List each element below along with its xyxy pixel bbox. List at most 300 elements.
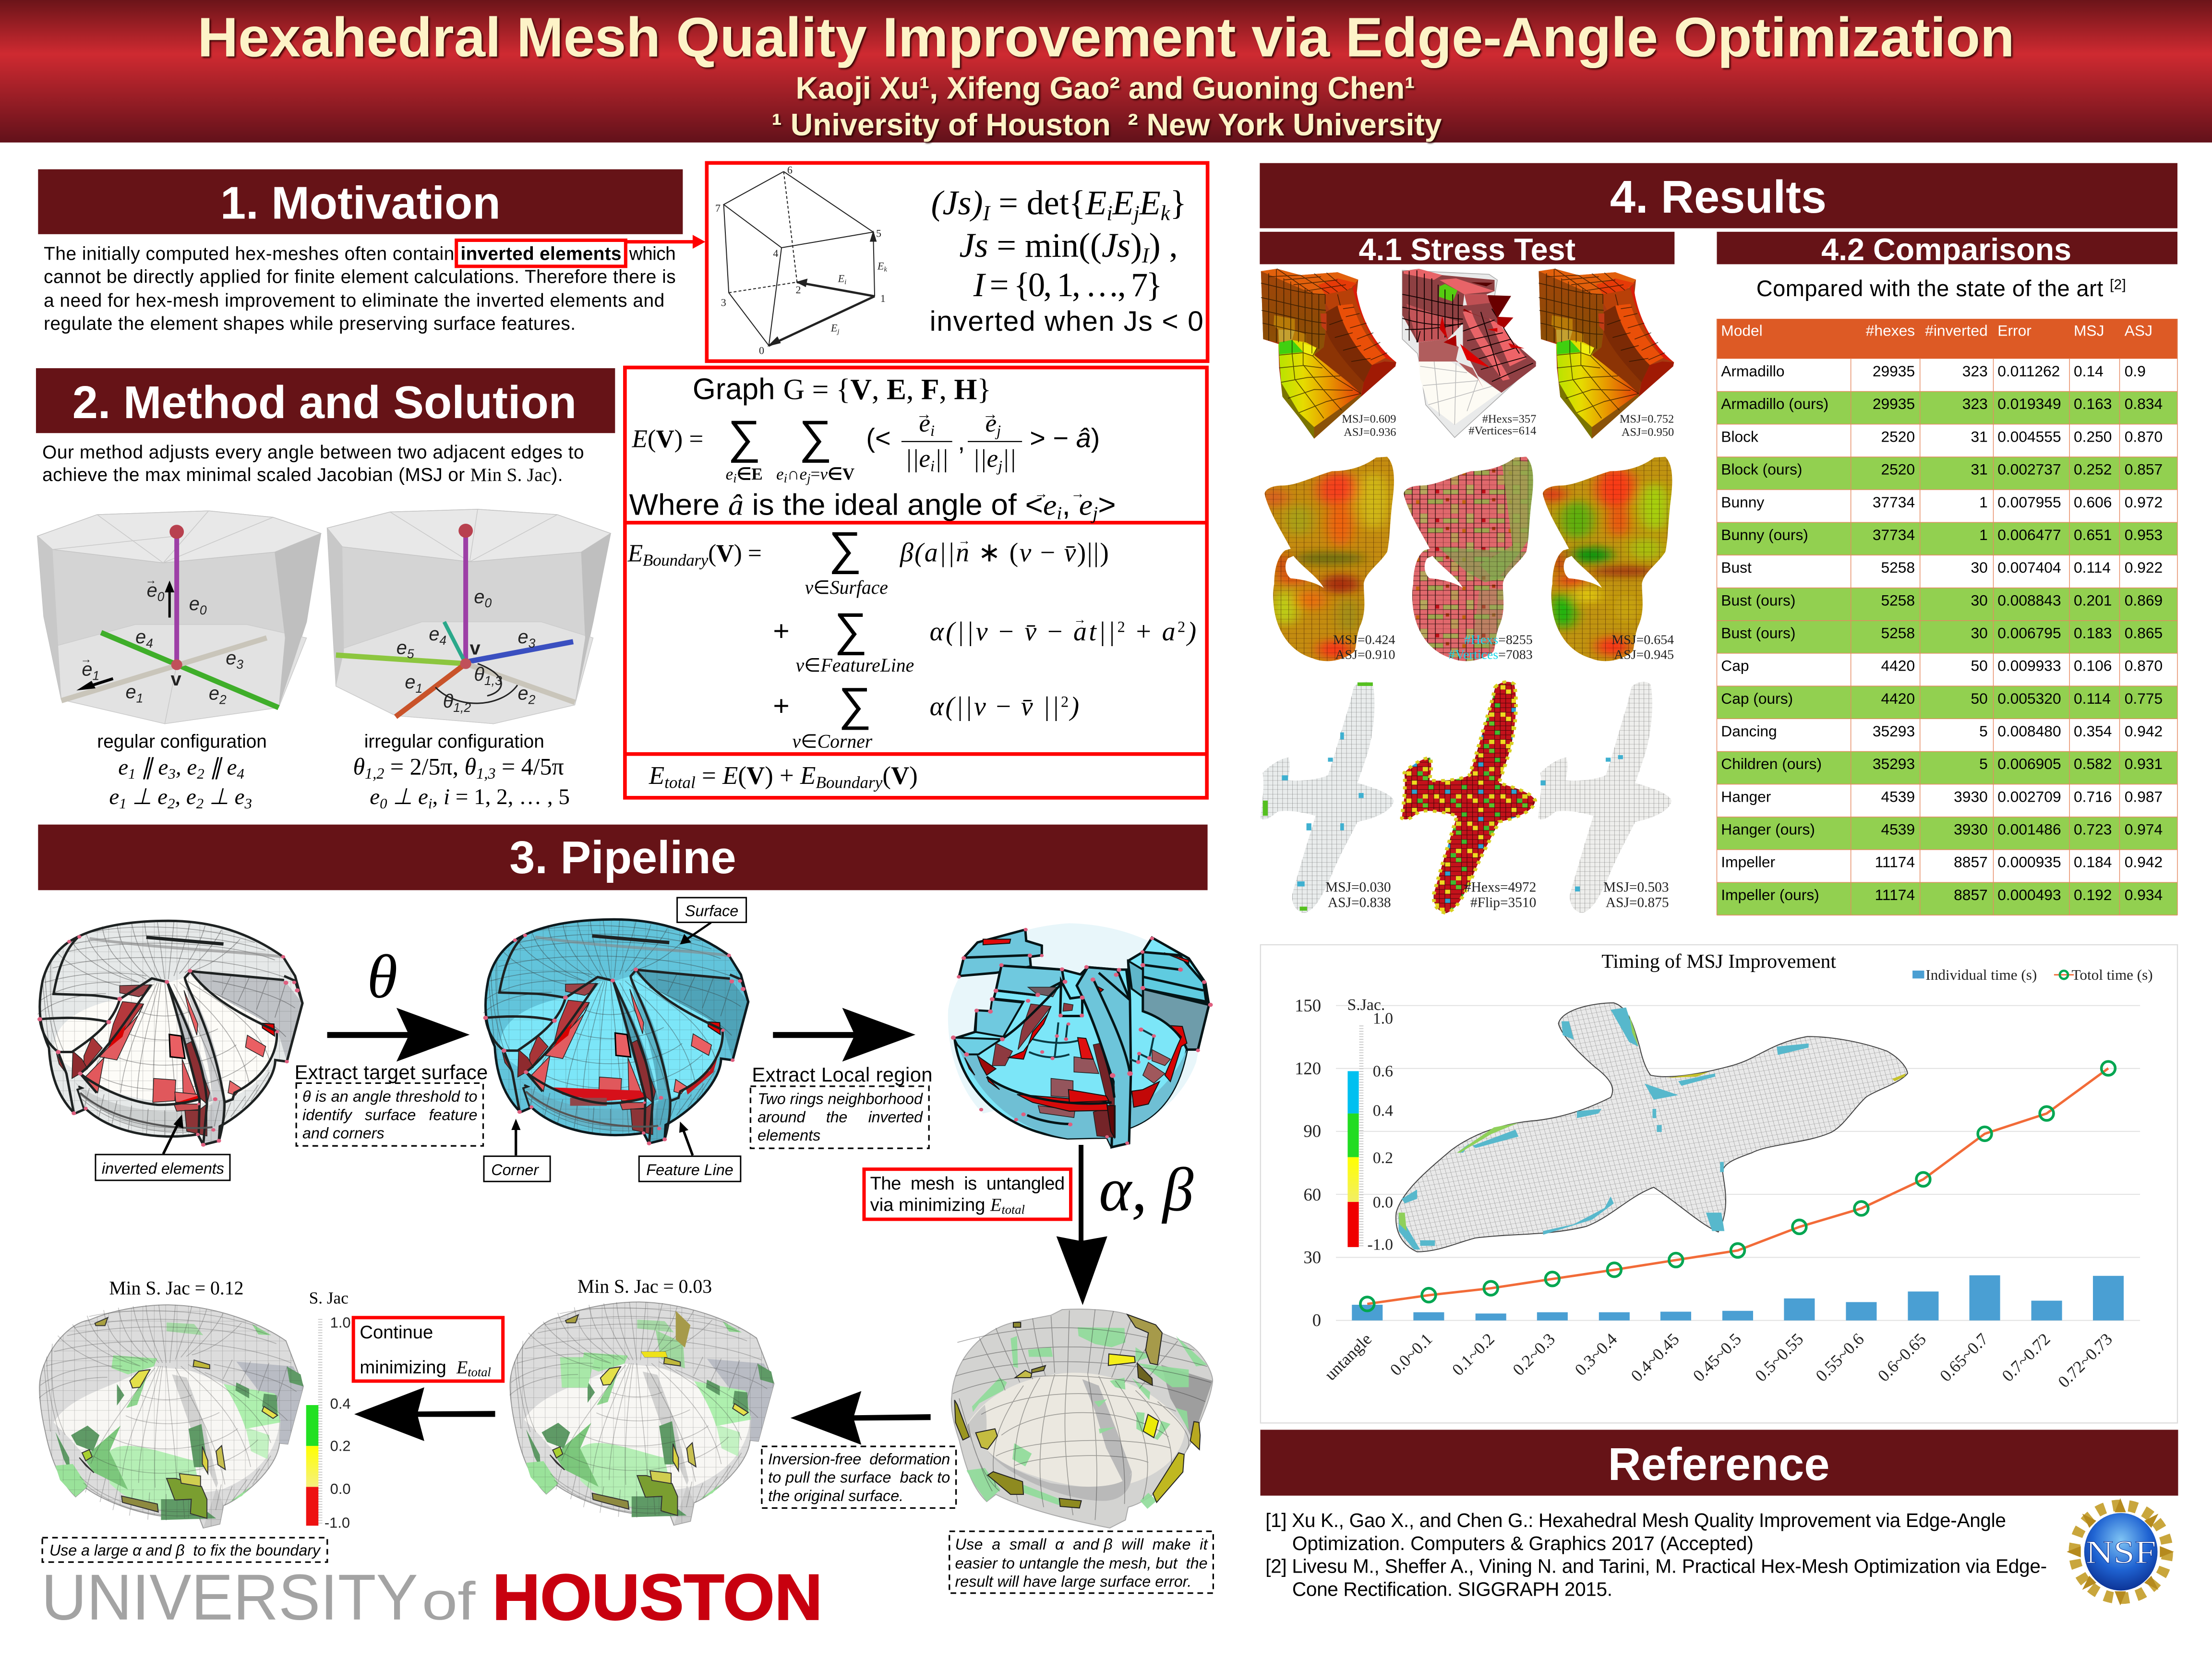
formula: boundary energy: v∈Surface [805, 577, 888, 598]
formula: boundary energy: + [773, 690, 790, 721]
caption: irregular configuration: e [370, 784, 380, 809]
row: Children ours: 5 [1979, 755, 1988, 772]
chart x labels: 0.6~0.65 [1874, 1330, 1930, 1385]
note: inversion-free deformation [762, 1446, 956, 1508]
caption: regular configuration [97, 732, 267, 812]
formula: boundary energy: Boundary [643, 551, 709, 569]
row: Impeller ours: 0.192 [2074, 886, 2112, 903]
logo: NSF: NSF [2086, 1534, 2156, 1570]
row: Bust ours second: 0.865 [2125, 625, 2163, 642]
row: Bust ours: 0.869 [2125, 591, 2163, 609]
formula: angle energy: > − â) [1030, 423, 1100, 453]
row: Impeller: 0.184 [2074, 854, 2112, 871]
colorbar: S.Jac: 0.2 [1373, 1149, 1393, 1167]
arrow: left to final result [354, 1387, 495, 1441]
chart axis and gridlines: 0 [1312, 1310, 1321, 1330]
formula: boundary energy: ∑ [829, 522, 862, 575]
row: Block ours: Block (ours) [1721, 461, 1803, 478]
chart legend: Individual time (s) [1925, 966, 2037, 983]
model: plane input [1261, 682, 1394, 913]
chart x labels: 0.7~0.72 [1998, 1330, 2054, 1385]
formula: angle energy: (< [866, 423, 891, 453]
text: reference list: Optimization. Computers & Graphics 2017 (Accepted) [1292, 1532, 1754, 1554]
arrow: alpha beta downward [1057, 1145, 1107, 1305]
formula: boundary energy: 2 [1118, 618, 1125, 636]
row: Hanger ours [1721, 821, 2163, 838]
callout: feature line [639, 1121, 741, 1181]
labels: stress test metrics: ASJ=0.875 [1606, 895, 1669, 911]
caption: regular configuration: 2 [196, 795, 204, 812]
panel: energy formulas [625, 368, 1207, 798]
chart x labels: 0.72~0.73 [2055, 1330, 2116, 1391]
note: inversion-free deformation: the original surface. [768, 1487, 903, 1504]
row: Armadillo ours: 0.163 [2074, 395, 2112, 412]
row: Armadillo ours [1721, 395, 2163, 412]
row: Bunny ours: 37734 [1873, 526, 1915, 543]
caption: regular configuration: e [109, 784, 119, 809]
row: Block ours: 31 [1971, 461, 1988, 478]
caption: regular configuration: , e [176, 755, 197, 780]
row: Bust ours second: Bust (ours) [1721, 625, 1795, 642]
row: Bunny ours: Bunny (ours) [1721, 526, 1808, 543]
symbol: alpha beta: α, β [1099, 1155, 1194, 1224]
labels: stress test metrics: #Hexs=8255 [1464, 633, 1533, 648]
diagram: hexahedron element: k [884, 266, 887, 274]
figure: regular configuration prism: v [171, 669, 181, 690]
formula: angle energy: → [983, 405, 998, 422]
caption: regular configuration: ⊥ e [127, 784, 168, 809]
text: reference list: [1] Xu K., Gao X., and Chen G.: Hexahedral Mesh Quality Improvement via Edge-Angle [1265, 1509, 2006, 1531]
figure: regular configuration prism: e [126, 682, 136, 703]
text: where clause: j [1090, 503, 1098, 523]
row: Block: 0.870 [2125, 428, 2163, 445]
figure: regular configuration prism: 4 [146, 636, 153, 650]
row: Hanger: 0.002709 [1997, 788, 2061, 805]
model: plane inverted [1402, 682, 1535, 913]
text: motivation paragraph: a need for hex-mesh improvement to eliminate the inverted elements and [44, 290, 664, 311]
labels: stress test metrics: ASJ=0.838 [1328, 895, 1391, 911]
caption: irregular configuration: θ [353, 753, 365, 780]
labels: stress test metrics: MSJ=0.752 [1620, 413, 1674, 426]
labels: stress test metrics: MSJ=0.609 [1342, 413, 1396, 426]
formula: boundary energy: ) [1069, 692, 1079, 721]
note: theta threshold: θ is an angle threshold to [302, 1088, 477, 1105]
row: Armadillo ours: 0.019349 [1997, 395, 2061, 412]
formula: boundary energy: + [1127, 617, 1160, 647]
note: use a large alpha beta: Use a large α and β to fix the boundary [49, 1542, 321, 1559]
text: reference list: [2] Livesu M., Sheffer A., Vining N. and Tarini, M. Practical Hex-Mesh Optimization via Edge- [1265, 1555, 2047, 1577]
heading: pipeline [38, 825, 1208, 890]
row: Hanger ours: 0.001486 [1997, 821, 2061, 838]
row: Bust: 30 [1971, 559, 1988, 576]
row: Block ours [1721, 461, 2163, 478]
colorbar: S. Jac: 1.0 [330, 1314, 351, 1331]
labels: stress test metrics: ASJ=0.945 [1614, 647, 1674, 662]
section 2: method and solution [36, 368, 615, 812]
text: where clause: → [1034, 485, 1048, 501]
chart x labels: 0.3~0.4 [1571, 1330, 1621, 1379]
figure: regular configuration prism: 1 [93, 668, 99, 683]
text: method description: Our method adjusts every angle between two adjacent edges to [42, 442, 584, 463]
title: Hexahedral Mesh Quality Improvement via Edge-Angle Optimization [197, 6, 2015, 69]
chart axis and gridlines: 150 [1295, 996, 1321, 1015]
row: Cap: Cap [1721, 657, 1749, 674]
formula: scaled jacobian: } [1170, 184, 1187, 222]
chart x labels: 0.0~0.1 [1386, 1330, 1436, 1379]
formula: angle energy: ||e [905, 445, 930, 473]
table header: Error [1997, 322, 2032, 339]
labels: stress test metrics: MSJ=0.030 [1325, 879, 1391, 895]
formula: angle energy: j [995, 422, 1001, 439]
mesh: untangled grey dome [951, 1309, 1213, 1528]
diagram: hexahedron element: i [844, 278, 846, 286]
diagram: hexahedron element: j [836, 328, 840, 336]
row: Bunny: 0.007955 [1997, 493, 2061, 511]
row: Bust: 0.922 [2125, 559, 2163, 576]
table header [1717, 319, 2177, 359]
row: Bust ours second: 30 [1971, 625, 1988, 642]
model: plane ours [1538, 682, 1671, 913]
mesh: local region fragments [948, 923, 1213, 1147]
row: Cap ours [1721, 690, 2163, 707]
formula: boundary energy: + [773, 615, 790, 647]
colorbar: S.Jac: 0.4 [1373, 1102, 1393, 1120]
heading: stress test: 4.1 Stress Test [1359, 232, 1575, 267]
chart x labels: 0.2~0.3 [1509, 1330, 1559, 1379]
figure: irregular configuration prism: 4 [439, 633, 446, 648]
figure: irregular configuration prism [327, 509, 611, 724]
row: Bunny: Bunny [1721, 493, 1764, 511]
formula: angle energy [632, 405, 1100, 485]
model: fandisk input [1261, 269, 1396, 439]
row: Cap: 50 [1971, 657, 1988, 674]
row: Cap: 0.870 [2125, 657, 2163, 674]
formula: angle energy: i [930, 422, 935, 439]
formula: angle energy: e [919, 409, 930, 437]
figure: irregular configuration prism: e [429, 624, 439, 645]
row: Bunny ours: 0.651 [2074, 526, 2112, 543]
chart axis and gridlines: 120 [1295, 1058, 1321, 1078]
row: Impeller: 0.000935 [1997, 854, 2061, 871]
affiliations: ¹ University of Houston ² New York University [772, 107, 1442, 142]
caption: irregular configuration: i = 1, 2, … , 5 [444, 784, 570, 809]
text: where clause: Where â is the ideal angle of < e [629, 489, 1056, 522]
table header: MSJ [2074, 322, 2104, 339]
row: Bust ours: 5258 [1881, 591, 1915, 609]
caption: irregular configuration: 0 [380, 795, 387, 812]
callout: continue minimizing: total [468, 1365, 491, 1379]
formula: angle energy: e [799, 465, 807, 483]
row: Cap: 0.106 [2074, 657, 2112, 674]
formula: scaled jacobian [930, 184, 1203, 337]
row: Armadillo: 0.011262 [1997, 362, 2060, 380]
heading: results: 4. Results [1610, 172, 1827, 223]
row: Bunny ours: 1 [1979, 526, 1988, 543]
logo: NSF [2067, 1498, 2174, 1605]
formula: scaled jacobian: E [1085, 184, 1106, 222]
figure: irregular configuration prism: e [518, 683, 529, 704]
formula: scaled jacobian: I [983, 201, 991, 225]
row: Impeller: 11174 [1875, 854, 1915, 871]
labels: stress test metrics: ASJ=0.950 [1622, 426, 1674, 439]
title banner [0, 0, 2212, 143]
labels: stress test metrics: ASJ=0.910 [1335, 647, 1395, 662]
row: Block ours: 2520 [1881, 461, 1915, 478]
formula: total energy: = [696, 762, 722, 790]
row: Cap: 4420 [1881, 657, 1915, 674]
chart bars: individual time [1352, 1275, 2124, 1321]
formula: boundary energy: (V) = [708, 540, 762, 567]
row: Children ours: 0.582 [2074, 755, 2112, 772]
row: Bust ours: 30 [1971, 591, 1988, 609]
formula: angle energy: j [805, 471, 811, 485]
note: theta threshold: and corners [302, 1125, 385, 1142]
heading: reference [1261, 1430, 2178, 1496]
figure: regular configuration prism: e [189, 593, 200, 614]
row: Impeller ours: 0.000493 [1997, 886, 2061, 903]
formula: total energy: Boundary [816, 773, 883, 792]
colorbar: S.Jac: 0.0 [1373, 1194, 1393, 1212]
formula: scaled jacobian: E [1139, 184, 1161, 222]
caption: regular configuration: 4 [237, 766, 244, 782]
heading: motivation [38, 169, 683, 234]
section 4: results [1258, 163, 2178, 1605]
figure: regular configuration prism: e [82, 659, 93, 680]
caption: regular configuration: ⊥ e [204, 784, 245, 809]
diagram: hexahedron element: 7 [715, 202, 721, 214]
callout: continue minimizing [353, 1318, 503, 1381]
text: motivation paragraph: inverted elements [461, 244, 622, 264]
text: motivation paragraph: regulate the element shapes while preserving surface features. [44, 313, 576, 334]
diagram: hexahedron element: 6 [787, 164, 793, 176]
row: Impeller: 8857 [1954, 854, 1988, 871]
row: Bust ours second: 0.006795 [1997, 625, 2061, 642]
mesh: bird model [1396, 1003, 1908, 1252]
diagram: hexahedron element: 2 [795, 284, 801, 296]
text: where clause: , [1062, 489, 1079, 522]
row: Hanger ours: 0.723 [2074, 821, 2112, 838]
formula: scaled jacobian: j [1131, 201, 1140, 225]
colorbar: S. Jac: S. Jac [309, 1288, 349, 1307]
heading: results [1260, 163, 2177, 228]
note: use a large alpha beta [42, 1538, 327, 1562]
figure: irregular configuration prism: e [397, 637, 407, 658]
text: motivation paragraph: cannot be directly applied for finite element calculations. Therefore there is [44, 267, 676, 288]
section 3: pipeline [37, 825, 1213, 1593]
colorbar: S.Jac [1347, 996, 1393, 1254]
row: Armadillo ours: 29935 [1873, 395, 1915, 412]
chart axis and gridlines: 90 [1303, 1121, 1321, 1141]
figure: regular configuration prism [37, 511, 321, 724]
label: min s jac 0.03: Min S. Jac = 0.03 [577, 1276, 712, 1297]
mesh: input with inverted elements [37, 921, 302, 1147]
chart title: Timing of MSJ Improvement [1601, 950, 1836, 973]
formula: scaled jacobian: E [1112, 184, 1134, 222]
heading: comparisons: 4.2 Comparisons [1821, 232, 2071, 267]
row: Impeller: 0.942 [2125, 854, 2163, 871]
arrow: theta extraction [327, 1008, 469, 1061]
row: Cap ours: 0.005320 [1997, 690, 2061, 707]
formula: angle energy: i [930, 457, 935, 475]
label: min s jac 0.12: Min S. Jac = 0.12 [109, 1277, 243, 1298]
formula: angle energy: e [776, 465, 784, 483]
row: Armadillo: 29935 [1873, 362, 1915, 380]
callout: corner: Corner [491, 1161, 539, 1178]
row: Impeller ours [1721, 886, 2163, 903]
formula: angle energy: , [958, 427, 965, 456]
note: two rings [750, 1086, 929, 1148]
callout: mesh is untangled: via minimizing E [870, 1195, 1001, 1215]
heading: pipeline: 3. Pipeline [509, 832, 736, 883]
arrow to formula box [626, 235, 705, 249]
text: where clause: > [1098, 489, 1116, 522]
symbol: theta: θ [367, 942, 397, 1011]
row: Children ours [1721, 755, 2163, 772]
row: Impeller ours: 0.934 [2125, 886, 2163, 903]
logo: university of houston: UNIVERSITY [41, 1561, 418, 1634]
caption: irregular configuration: ⊥ e [387, 784, 428, 809]
note: use a small alpha beta: result will have large surface error. [955, 1573, 1191, 1590]
callout: continue minimizing: Continue [360, 1322, 433, 1343]
heading: motivation: 1. Motivation [220, 178, 501, 229]
row: Cap ours: 0.114 [2074, 690, 2111, 707]
figure: regular configuration prism: e [226, 648, 236, 669]
callout: mesh is untangled [864, 1169, 1071, 1219]
row: Block: 2520 [1881, 428, 1915, 445]
figure: regular configuration prism: 1 [136, 691, 143, 706]
row: Bust: 5258 [1881, 559, 1915, 576]
formula: boundary energy: v∈Corner [793, 731, 873, 752]
row: Bunny: 1 [1979, 493, 1988, 511]
figure: irregular configuration prism: 3 [529, 636, 536, 650]
row: Cap: 0.009933 [1997, 657, 2061, 674]
model: fandisk ours [1539, 269, 1674, 439]
heading: reference: Reference [1608, 1439, 1830, 1490]
chart x labels: 0.4~0.45 [1627, 1330, 1683, 1385]
formula: scaled jacobian: ) , [1149, 226, 1178, 264]
figure: irregular configuration prism: θ [474, 664, 484, 685]
diagram: hexahedron element: E [878, 260, 884, 272]
caption: irregular configuration: θ [465, 753, 476, 780]
chart axis and gridlines: 30 [1303, 1248, 1321, 1267]
formula: angle energy: ∑ [728, 410, 761, 463]
caption: irregular configuration: 1,2 [365, 765, 384, 782]
row: Children ours: 0.931 [2125, 755, 2163, 772]
formula: angle energy: v∈V [820, 465, 854, 483]
label: extract local region: Extract Local region [752, 1063, 933, 1086]
formula: boundary energy: ∑ [838, 678, 871, 730]
note: inversion-free deformation: to pull the surface back to [768, 1469, 950, 1486]
caption: regular configuration: ∥ e [204, 755, 237, 780]
row: Cap ours: 50 [1971, 690, 1988, 707]
colorbar: S. Jac [306, 1288, 351, 1531]
heading: method: 2. Method and Solution [72, 377, 577, 428]
arrow: local region extraction [773, 1008, 915, 1061]
diagram: hexahedron element: E [831, 322, 837, 334]
chart legend: Totol time (s) [2072, 966, 2153, 983]
row: Block: Block [1721, 428, 1758, 445]
row: Cap ours: 4420 [1881, 690, 1915, 707]
figure: regular configuration prism: e [147, 580, 157, 601]
figure: irregular configuration prism: v [470, 638, 481, 659]
formula: scaled jacobian: i [1106, 201, 1113, 225]
row: Block ours: 0.252 [2074, 461, 2112, 478]
caption: regular configuration: regular configuration [97, 732, 267, 752]
section: reference [1261, 1430, 2178, 1605]
note: use a small alpha beta: easier to untangle the mesh, but the [955, 1554, 1208, 1572]
text: motivation paragraph: which [629, 244, 676, 264]
row: Armadillo ours: 323 [1962, 395, 1988, 412]
text: method description [42, 442, 584, 485]
formula: angle energy: i [733, 471, 737, 485]
formula: angle energy: ||e [973, 445, 998, 473]
formula: angle energy: ∑ [799, 410, 832, 463]
labels: stress test metrics [1325, 413, 1674, 911]
row: Block [1721, 428, 2163, 445]
note: theta threshold [296, 1083, 483, 1146]
row: Bust ours [1721, 591, 2163, 609]
formula: scaled jacobian: = det{ [990, 184, 1085, 222]
diagram: hexahedron element: 0 [759, 345, 764, 357]
formula: graph definition: Graph G = {V, E, F, H} [693, 373, 991, 406]
colorbar: S. Jac: 0.0 [330, 1480, 351, 1497]
figure: irregular configuration prism: 0 [484, 596, 492, 610]
caption: regular configuration: 2 [197, 766, 204, 782]
formula: angle energy: e [726, 465, 733, 483]
caption: irregular configuration: = 4/5π [496, 753, 564, 780]
note: theta threshold: identify surface feature [302, 1106, 477, 1123]
formula: boundary energy: 2 [1178, 618, 1185, 636]
heading: stress test [1260, 232, 1674, 267]
note: use a small alpha beta: Use a small α and β will make it [955, 1536, 1209, 1553]
diagram: hexahedron element: 4 [773, 247, 778, 259]
callout: corner [484, 1118, 550, 1181]
callout: surface [677, 898, 746, 945]
row: Hanger: 0.716 [2074, 788, 2112, 805]
row: Hanger: 3930 [1954, 788, 1988, 805]
colorbar: S.Jac: 1.0 [1373, 1010, 1393, 1027]
formula: angle energy: || [1002, 445, 1016, 473]
formula: boundary energy: → [958, 533, 971, 547]
row: Bunny ours: 0.953 [2125, 526, 2163, 543]
row: Children ours: 35293 [1873, 755, 1915, 772]
row: Cap [1721, 657, 2163, 674]
row: Hanger ours: Hanger (ours) [1721, 821, 1815, 838]
labels: stress test metrics: ASJ=0.936 [1344, 426, 1396, 439]
model: bust ours [1536, 456, 1679, 664]
callout: mesh is untangled: The mesh is untangled [870, 1173, 1065, 1194]
row: Bunny: 37734 [1873, 493, 1915, 511]
formula: angle energy: i [784, 471, 787, 485]
labels: stress test metrics: #Flip=3510 [1470, 895, 1536, 911]
logo: university of houston [41, 1561, 822, 1634]
heading: comparisons [1717, 232, 2177, 267]
text: where clause: → [1071, 485, 1085, 501]
figure: regular configuration prism: 0 [200, 603, 207, 617]
chart line: total time [1367, 1069, 2108, 1304]
row: Dancing: 0.354 [2074, 722, 2112, 740]
colorbar: S.Jac: 0.6 [1373, 1062, 1393, 1080]
row: Bust [1721, 559, 2163, 576]
row: Dancing: 0.942 [2125, 722, 2163, 740]
row: Dancing: Dancing [1721, 722, 1777, 740]
row: Bunny: 0.972 [2125, 493, 2163, 511]
row: Bunny [1721, 493, 2163, 511]
chart markers: total time [1360, 1061, 2115, 1311]
figure: regular configuration prism: → [81, 653, 92, 665]
diagram: hexahedron element: 5 [876, 228, 881, 240]
figure: regular configuration prism: → [145, 574, 156, 587]
